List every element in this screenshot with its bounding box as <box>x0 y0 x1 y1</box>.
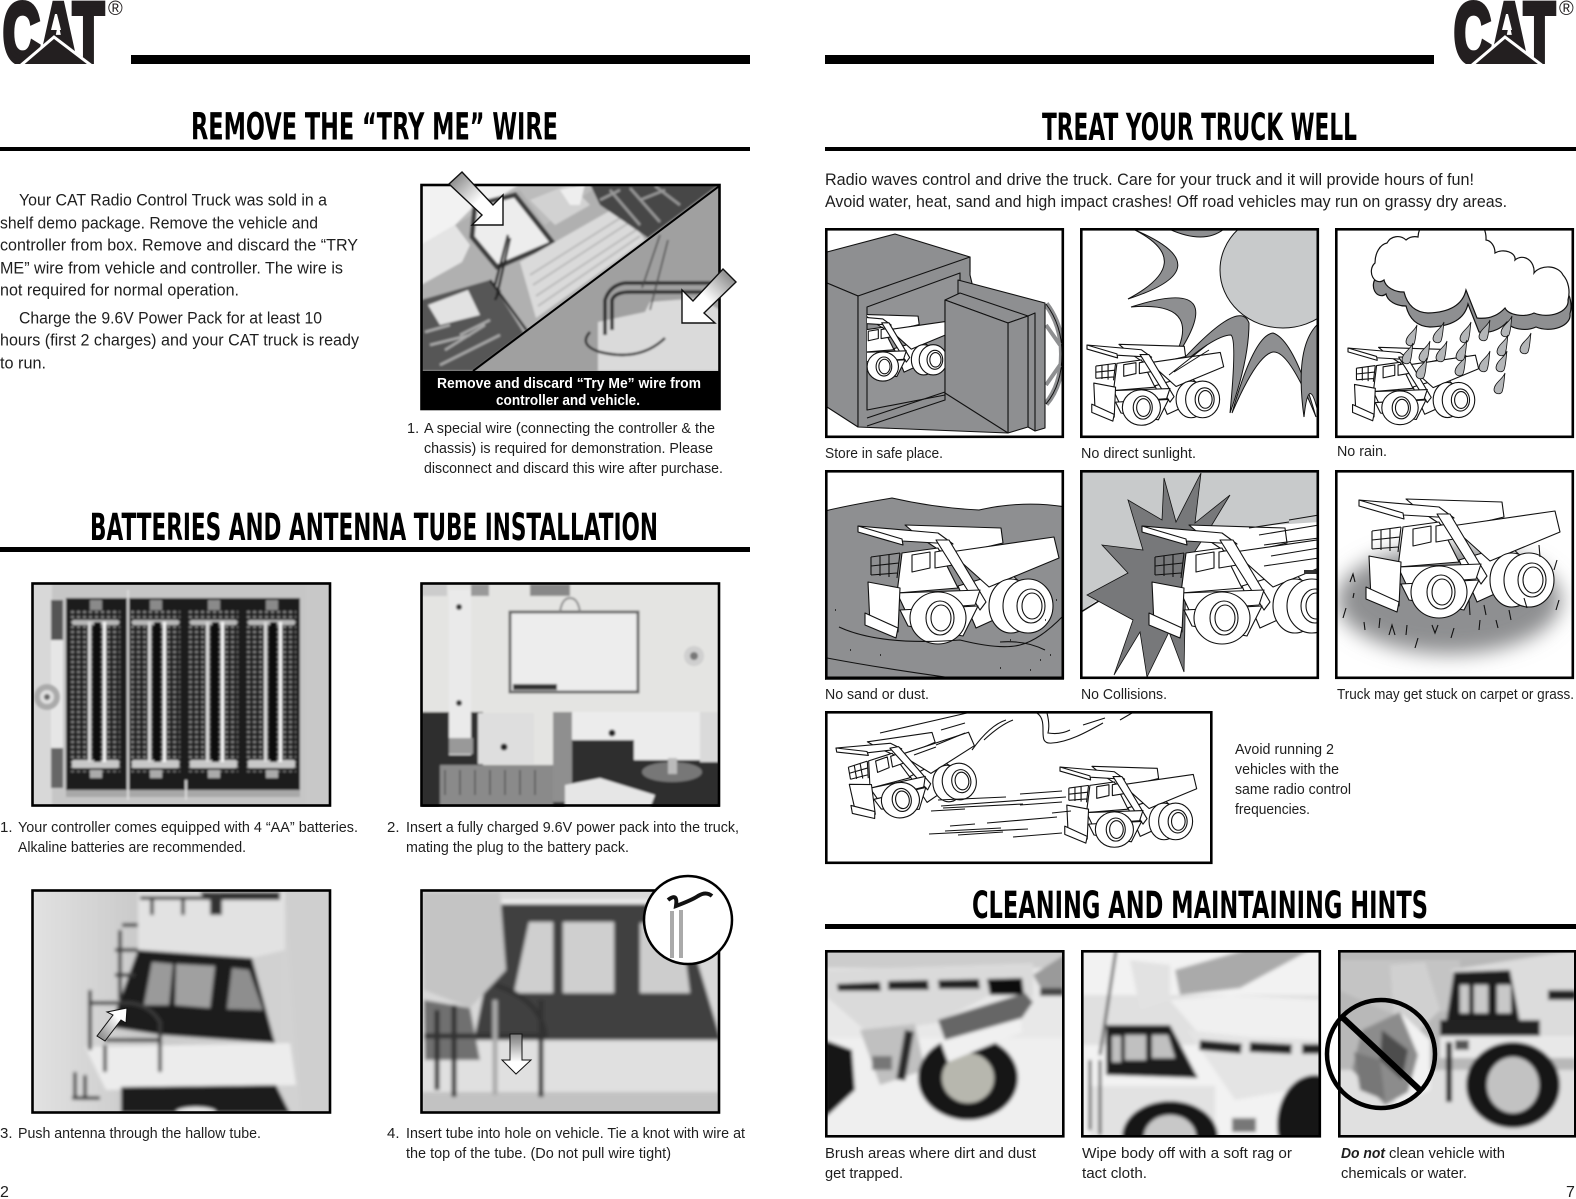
panel: no direct sunlight <box>1080 228 1320 438</box>
text block: step wire note: disconnect and discard this wire after purchase. <box>424 461 723 477</box>
captions cleaning: get trapped. <box>825 1165 903 1182</box>
photo: do not use chemicals <box>1327 950 1576 1140</box>
text block: avoid running 2 vehicles <box>1235 741 1351 818</box>
heading: treat your truck well <box>825 106 1576 151</box>
caption band: controller and vehicle. <box>496 393 640 409</box>
heading: batteries and antenna <box>0 506 750 552</box>
text block: steps 3 and 4 <box>0 1125 746 1162</box>
photo: try me wire <box>421 172 736 409</box>
panel: no rain <box>1336 210 1573 437</box>
text block: radio waves intro: Avoid water, heat, sand and high impact crashes! Off road vehicles may run on grassy dry areas. <box>825 193 1507 211</box>
captions row two: No sand or dust. <box>825 686 929 703</box>
text block: avoid running 2 vehicles: same radio control <box>1235 781 1351 798</box>
panel: carpet or grass <box>1336 471 1573 678</box>
text block: steps 3 and 4: Push antenna through the hallow tube. <box>18 1125 261 1142</box>
captions row one: No direct sunlight. <box>1081 445 1196 462</box>
text block: steps 1 and 2 <box>0 819 739 856</box>
captions row one: Store in safe place. <box>825 445 943 462</box>
text block: intro paragraphs: shelf demo package. Remove the vehicle and <box>0 214 318 232</box>
arrow: down <box>502 1034 531 1074</box>
captions cleaning: tact cloth. <box>1082 1165 1147 1182</box>
heading: remove the try me wire: REMOVE THE “TRY ME” WIRE <box>191 106 558 148</box>
text block: step wire note <box>407 421 723 477</box>
heading: batteries and antenna: BATTERIES AND ANTENNA TUBE INSTALLATION <box>90 506 658 549</box>
text block: steps 1 and 2: Insert a fully charged 9.6V power pack into the truck, <box>406 819 739 836</box>
text block: step wire note: 1. <box>407 421 419 437</box>
inset: tube top knot <box>644 876 732 964</box>
photo: brush <box>825 950 1065 1138</box>
text block: steps 3 and 4: Insert tube into hole on vehicle. Tie a knot with wire at <box>406 1125 746 1142</box>
text block: steps 3 and 4: the top of the tube. (Do not pull wire tight) <box>406 1145 671 1162</box>
icon: prohibition sign <box>1327 1000 1435 1108</box>
text block: avoid running 2 vehicles: frequencies. <box>1235 801 1310 818</box>
caption band <box>421 371 720 409</box>
text block: radio waves intro <box>825 171 1507 211</box>
panel: no collisions <box>1080 470 1343 678</box>
panel: no sand or dust <box>825 471 1066 680</box>
photo: power pack <box>421 582 721 808</box>
text block: radio waves intro: Radio waves control and drive the truck. Care for your truck and it will provide hours of fun! <box>825 171 1474 189</box>
captions cleaning: chemicals or water. <box>1341 1165 1467 1182</box>
heading: treat your truck well: TREAT YOUR TRUCK WELL <box>1042 106 1357 149</box>
captions row one <box>825 443 1387 462</box>
photo: wipe with cloth <box>1081 950 1322 1138</box>
heading: remove the try me wire <box>0 106 750 151</box>
text block: intro paragraphs: Charge the 9.6V Power Pack for at least 10 <box>19 310 322 328</box>
text block: step wire note: A special wire (connecting the controller & the <box>424 421 715 437</box>
text block: steps 1 and 2: 2. <box>387 819 400 836</box>
captions cleaning: Wipe body off with a soft rag or <box>1082 1145 1292 1162</box>
captions cleaning: clean vehicle with <box>1389 1145 1505 1162</box>
arrow: top left <box>449 172 503 225</box>
text block: step wire note: chassis) is required for demonstration. Please <box>424 441 713 457</box>
logo: CAT left <box>3 0 122 64</box>
text block: steps 1 and 2: Your controller comes equipped with 4 “AA” batteries. <box>18 819 358 836</box>
header bar right <box>825 55 1434 64</box>
captions row one: No rain. <box>1337 443 1387 460</box>
text block: intro paragraphs: not required for normal operation. <box>0 282 239 300</box>
text block: steps 1 and 2: Alkaline batteries are recommended. <box>18 839 246 856</box>
text block: steps 1 and 2: 1. <box>0 819 13 836</box>
text block: steps 3 and 4: 3. <box>0 1125 13 1142</box>
text block: avoid running 2 vehicles: Avoid running 2 <box>1235 741 1334 758</box>
text block: intro paragraphs: controller from box. Remove and discard the “TRY <box>0 236 358 254</box>
text block: steps 1 and 2: mating the plug to the battery pack. <box>406 839 629 856</box>
captions cleaning: Do not <box>1341 1145 1386 1162</box>
text block: intro paragraphs: to run. <box>0 354 46 372</box>
text block: intro paragraphs: ME” wire from vehicle and controller. The wire is <box>0 260 343 278</box>
text block: intro paragraphs <box>0 192 360 372</box>
photo: tube into hole <box>421 876 732 1115</box>
text block: steps 3 and 4: 4. <box>387 1125 400 1142</box>
captions row two: No Collisions. <box>1081 686 1167 703</box>
captions cleaning <box>825 1145 1505 1182</box>
caption band: Remove and discard “Try Me” wire from <box>437 376 701 392</box>
header bar left <box>131 55 750 64</box>
captions cleaning: Brush areas where dirt and dust <box>825 1145 1037 1162</box>
text block: avoid running 2 vehicles: vehicles with the <box>1235 761 1339 778</box>
arrow: right <box>682 269 736 323</box>
photo: antenna through tube <box>32 889 332 1117</box>
panel: two vehicles radio frequencies <box>826 712 1211 863</box>
photo: batteries <box>32 582 332 808</box>
text block: intro paragraphs: Your CAT Radio Control Truck was sold in a <box>19 192 328 210</box>
text block: intro paragraphs: hours (first 2 charges) and your CAT truck is ready <box>0 332 360 350</box>
captions row two <box>825 686 1574 703</box>
panel: store in safe place <box>826 229 1063 437</box>
